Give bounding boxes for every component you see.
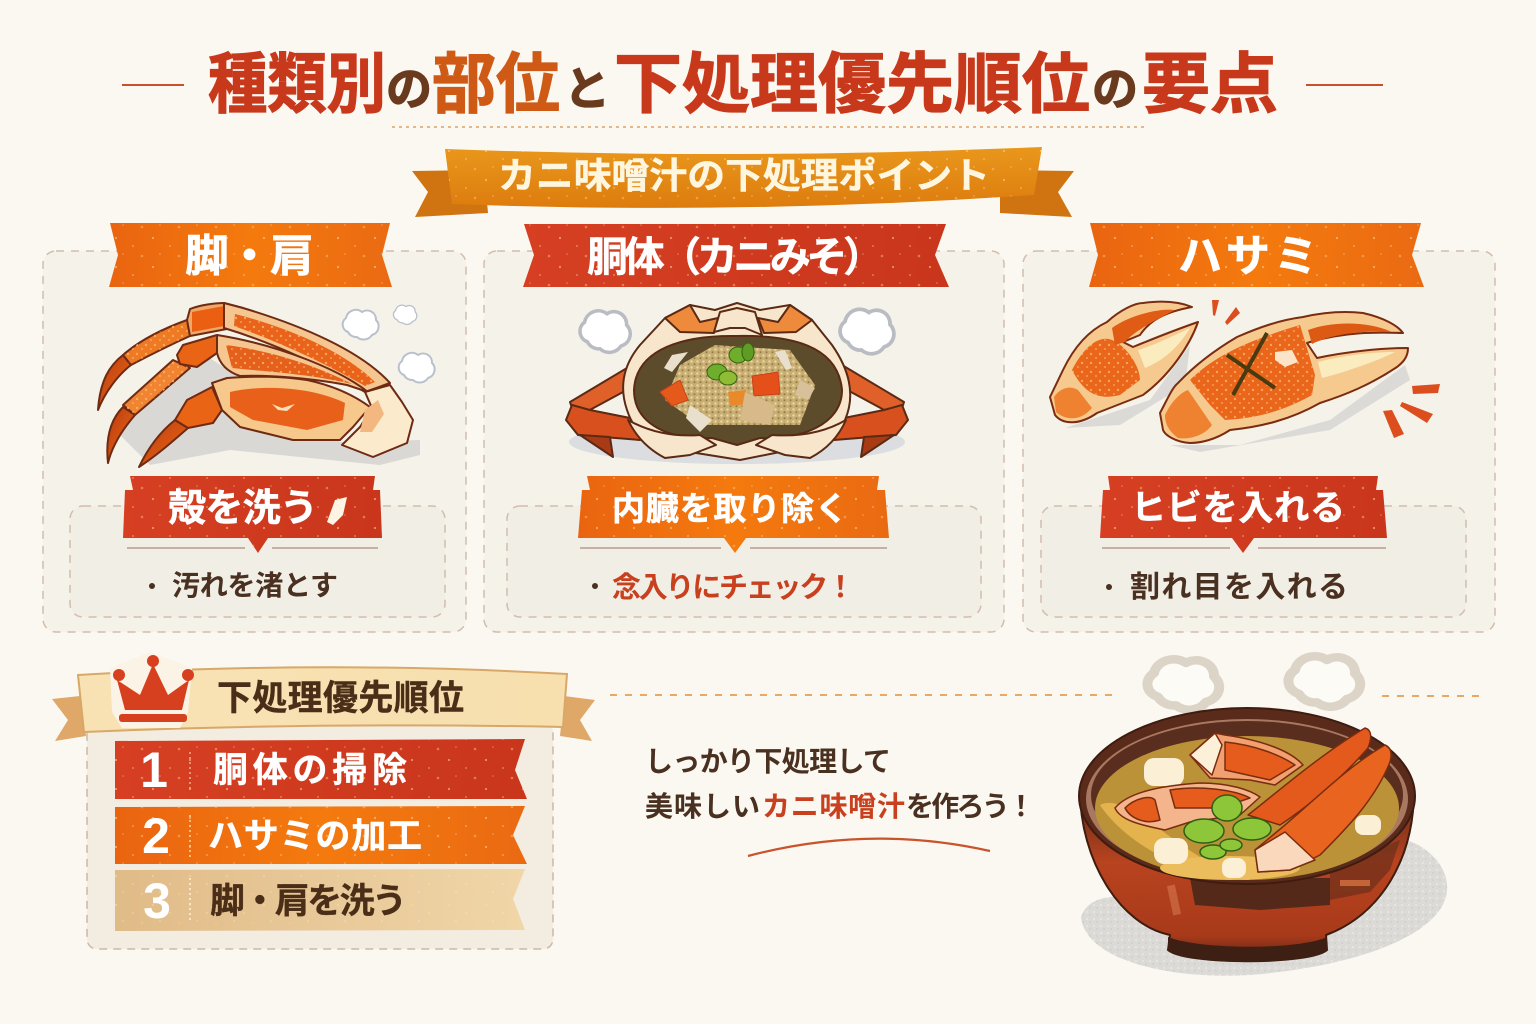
steam <box>1147 656 1360 710</box>
subheading ribbon: wash shell <box>123 476 382 553</box>
tofu pieces <box>1144 758 1381 878</box>
subheading ribbon: make cracks: ヒビを入れる <box>1131 489 1345 528</box>
rank 3: 3 <box>143 873 171 929</box>
heading ribbon: priority <box>78 667 567 732</box>
title: 下処理優先順位 <box>614 47 1090 121</box>
inner box <box>70 506 445 617</box>
illustration: crab miso soup bowl <box>1079 656 1447 976</box>
icon: impact marks <box>1212 300 1440 438</box>
title: 要点 <box>1142 47 1278 121</box>
illustration: open crab shell <box>566 303 908 464</box>
title: の <box>1092 63 1138 115</box>
title: 種類別 <box>208 47 386 121</box>
panel: priority order <box>52 652 595 949</box>
subheading ribbon: wash shell: 殻を洗う <box>168 488 318 530</box>
top ribbon banner: カニ味噌汁の下処理ポイント <box>498 155 990 196</box>
text: check carefully: 念入りにチェック！ <box>612 571 855 604</box>
ribbon tails <box>52 696 595 741</box>
rank 2: ハサミの加工 <box>208 817 422 856</box>
rank 1: 胴体の掃除 <box>213 751 407 790</box>
heading ribbon: legs and shoulder <box>109 223 392 287</box>
title: 部位 <box>432 47 560 121</box>
text: make a slit: 割れ目を入れる <box>1130 571 1348 604</box>
closing message <box>645 746 1035 856</box>
heading ribbon: claws <box>1089 223 1424 287</box>
illustration: crab claws <box>1050 302 1410 452</box>
rank 1: 1 <box>140 742 168 798</box>
inner box <box>507 506 981 617</box>
heading ribbon: claws: ハサミ <box>1178 232 1318 281</box>
closing message: しっかり下処理して <box>645 746 891 777</box>
top ribbon banner <box>412 147 1074 217</box>
divider: dashed line <box>610 695 1485 696</box>
subheading ribbon: make cracks <box>1100 476 1387 553</box>
crab meat pieces <box>1115 728 1391 872</box>
heading ribbon: body: 胴体（カニみそ） <box>587 234 884 280</box>
heading ribbon: priority: 下処理優先順位 <box>217 679 464 718</box>
title: と <box>564 63 610 115</box>
text: remove dirt: 汚れを渚とす <box>172 570 338 601</box>
title <box>122 47 1383 127</box>
subheading ribbon: remove guts <box>578 476 889 553</box>
panel: body crab miso <box>484 224 1004 632</box>
rank 3: 脚・肩を洗う <box>210 882 407 921</box>
title: の <box>386 63 432 115</box>
illustration: crab legs <box>98 303 420 467</box>
rank 2 <box>115 806 527 864</box>
icon: steam puffs <box>580 309 894 354</box>
inner box <box>1041 506 1466 617</box>
closing message: 美味しい <box>645 791 760 822</box>
heading ribbon: body <box>523 224 949 287</box>
icon: crown <box>110 652 194 728</box>
closing message: カニ味噌汁 <box>762 791 905 822</box>
icon: steam puffs <box>343 305 435 383</box>
rank 3 <box>115 869 525 931</box>
rank 1 <box>115 739 527 799</box>
heading ribbon: legs and shoulder: 脚・肩 <box>185 232 314 281</box>
green onion <box>1184 795 1271 859</box>
closing message: を作ろう！ <box>906 791 1035 822</box>
panel: claws <box>1023 223 1495 632</box>
rank 2: 2 <box>142 808 170 864</box>
panel: legs and shoulder <box>43 223 466 632</box>
subheading ribbon: remove guts: 内臓を取り除く <box>612 490 848 527</box>
